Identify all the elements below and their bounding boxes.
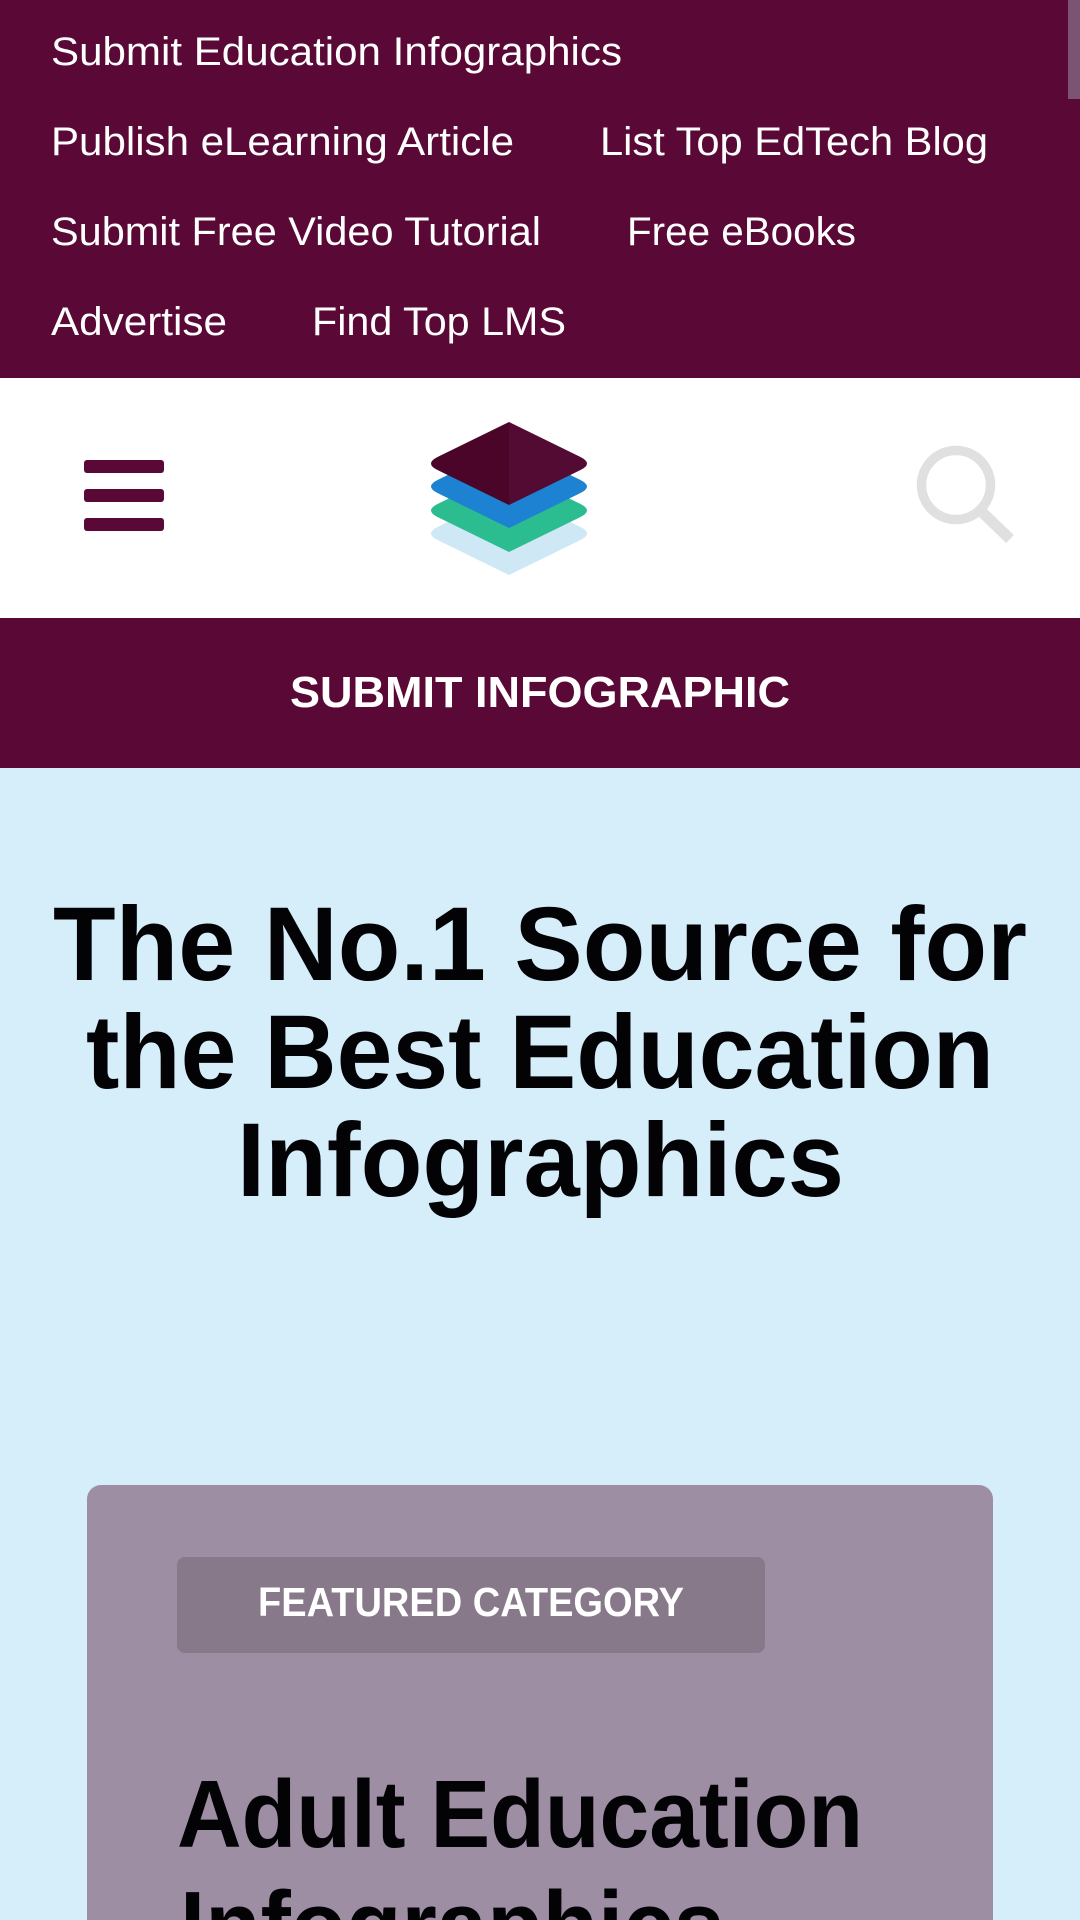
badge: featured category: FEATURED CATEGORY (258, 1579, 684, 1625)
badge: featured category (177, 1557, 765, 1653)
link: Find Top LMS: Find Top LMS (312, 300, 566, 344)
icon: search (922, 450, 1010, 539)
panel: featured category card (87, 1485, 993, 1920)
card heading: Adult Education (177, 1761, 863, 1868)
title (53, 886, 1027, 1219)
panel: submit infographic banner (0, 618, 1080, 768)
title: the Best Education (86, 994, 994, 1111)
card heading (177, 1761, 863, 1920)
link: List Top EdTech Blog: List Top EdTech Blog (600, 120, 988, 164)
icon: layered logo (431, 422, 587, 575)
title: Infographics (237, 1102, 844, 1219)
scrollbar thumb (1068, 0, 1080, 99)
link: Free eBooks: Free eBooks (627, 210, 856, 254)
link: Advertise: Advertise (51, 300, 227, 344)
link: Submit Free Video Tutorial: Submit Free Video Tutorial (51, 210, 541, 254)
icon: hamburger menu (84, 460, 164, 531)
link: Submit Education Infographics: Submit Education Infographics (51, 30, 622, 74)
panel: header bar (0, 378, 1080, 618)
title: The No.1 Source for (53, 886, 1027, 1003)
button label: SUBMIT INFOGRAPHIC (290, 668, 790, 717)
link: Publish eLearning Article: Publish eLearning Article (51, 120, 514, 164)
panel: top navigation links (0, 0, 1080, 378)
